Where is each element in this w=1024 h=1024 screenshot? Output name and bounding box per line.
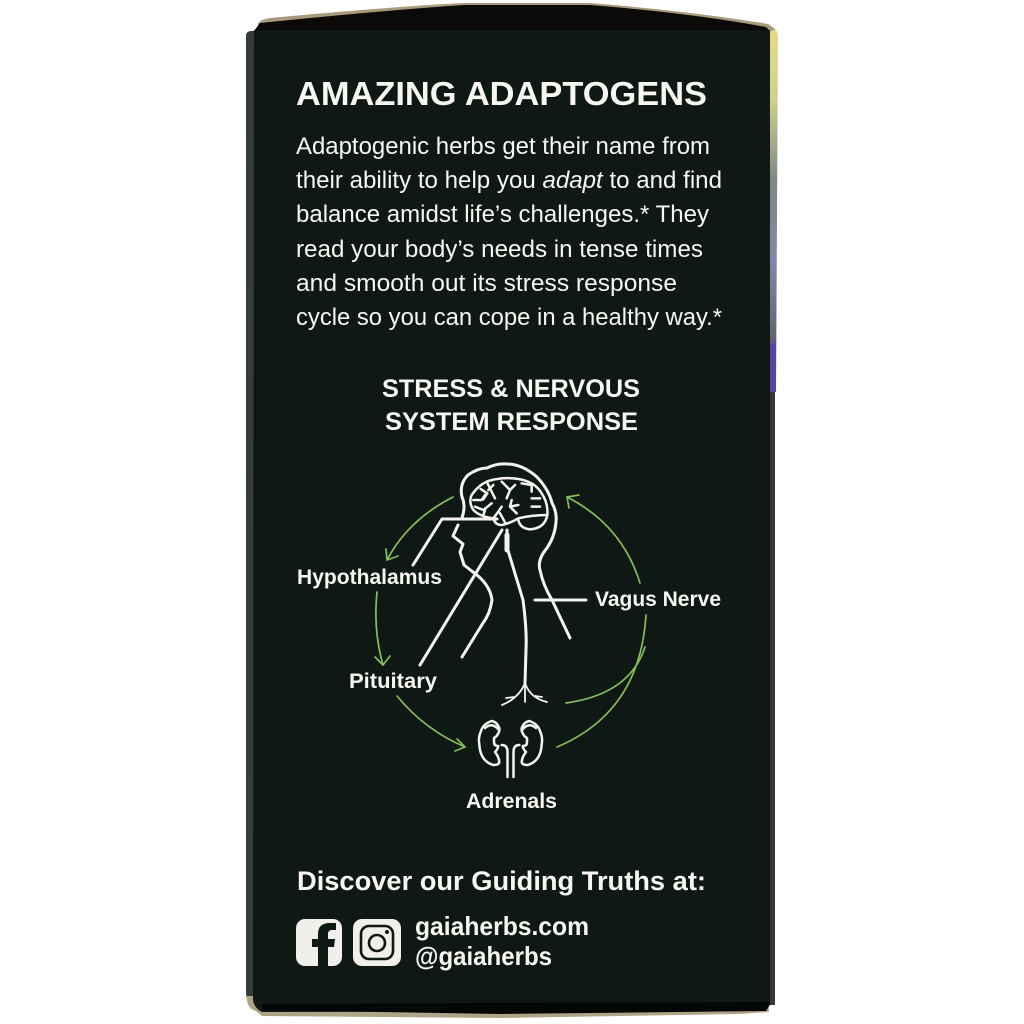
heading: AMAZING ADAPTOGENS xyxy=(296,75,707,112)
intro paragraph: cycle so you can cope in a healthy way.* xyxy=(296,304,722,331)
call to action: Discover our Guiding Truths at: xyxy=(297,866,706,896)
intro paragraph: and smooth out its stress response xyxy=(296,270,677,297)
diagram heading xyxy=(382,375,640,436)
icon: kidneys xyxy=(479,721,542,777)
icon: head and neck outline xyxy=(453,464,570,657)
website and handle: @gaiaherbs xyxy=(415,941,552,971)
icon: facebook xyxy=(296,919,342,966)
spine and vagus nerve xyxy=(502,530,547,705)
top flap shadow xyxy=(254,5,770,31)
intro paragraph: their ability to help you adapt to and find xyxy=(296,167,722,194)
label: pituitary: Pituitary xyxy=(349,670,437,693)
dark box face xyxy=(253,30,770,1012)
icon: instagram xyxy=(353,919,401,966)
bottom flap shadow xyxy=(262,1002,770,1014)
box edges xyxy=(246,3,778,1018)
diagram heading: STRESS & NERVOUS xyxy=(382,375,640,403)
label: hypothalamus: Hypothalamus xyxy=(297,566,442,589)
icon: brain xyxy=(470,478,547,529)
label: adrenals: Adrenals xyxy=(466,790,557,813)
leader: vagus nerve xyxy=(535,598,586,602)
green cycle arrows xyxy=(375,495,646,751)
website and handle: gaiaherbs.com xyxy=(415,911,589,941)
intro paragraph xyxy=(296,133,722,331)
website and handle xyxy=(415,911,589,971)
stress response diagram xyxy=(297,464,721,813)
intro paragraph: Adaptogenic herbs get their name from xyxy=(296,133,710,160)
leader: hypothalamus xyxy=(413,519,497,565)
diagram heading: SYSTEM RESPONSE xyxy=(385,408,638,436)
intro paragraph: balance amidst life’s challenges.* They xyxy=(296,201,709,228)
leader: pituitary xyxy=(420,530,502,665)
intro paragraph: read your body’s needs in tense times xyxy=(296,236,703,263)
label: vagus nerve: Vagus Nerve xyxy=(595,588,721,611)
